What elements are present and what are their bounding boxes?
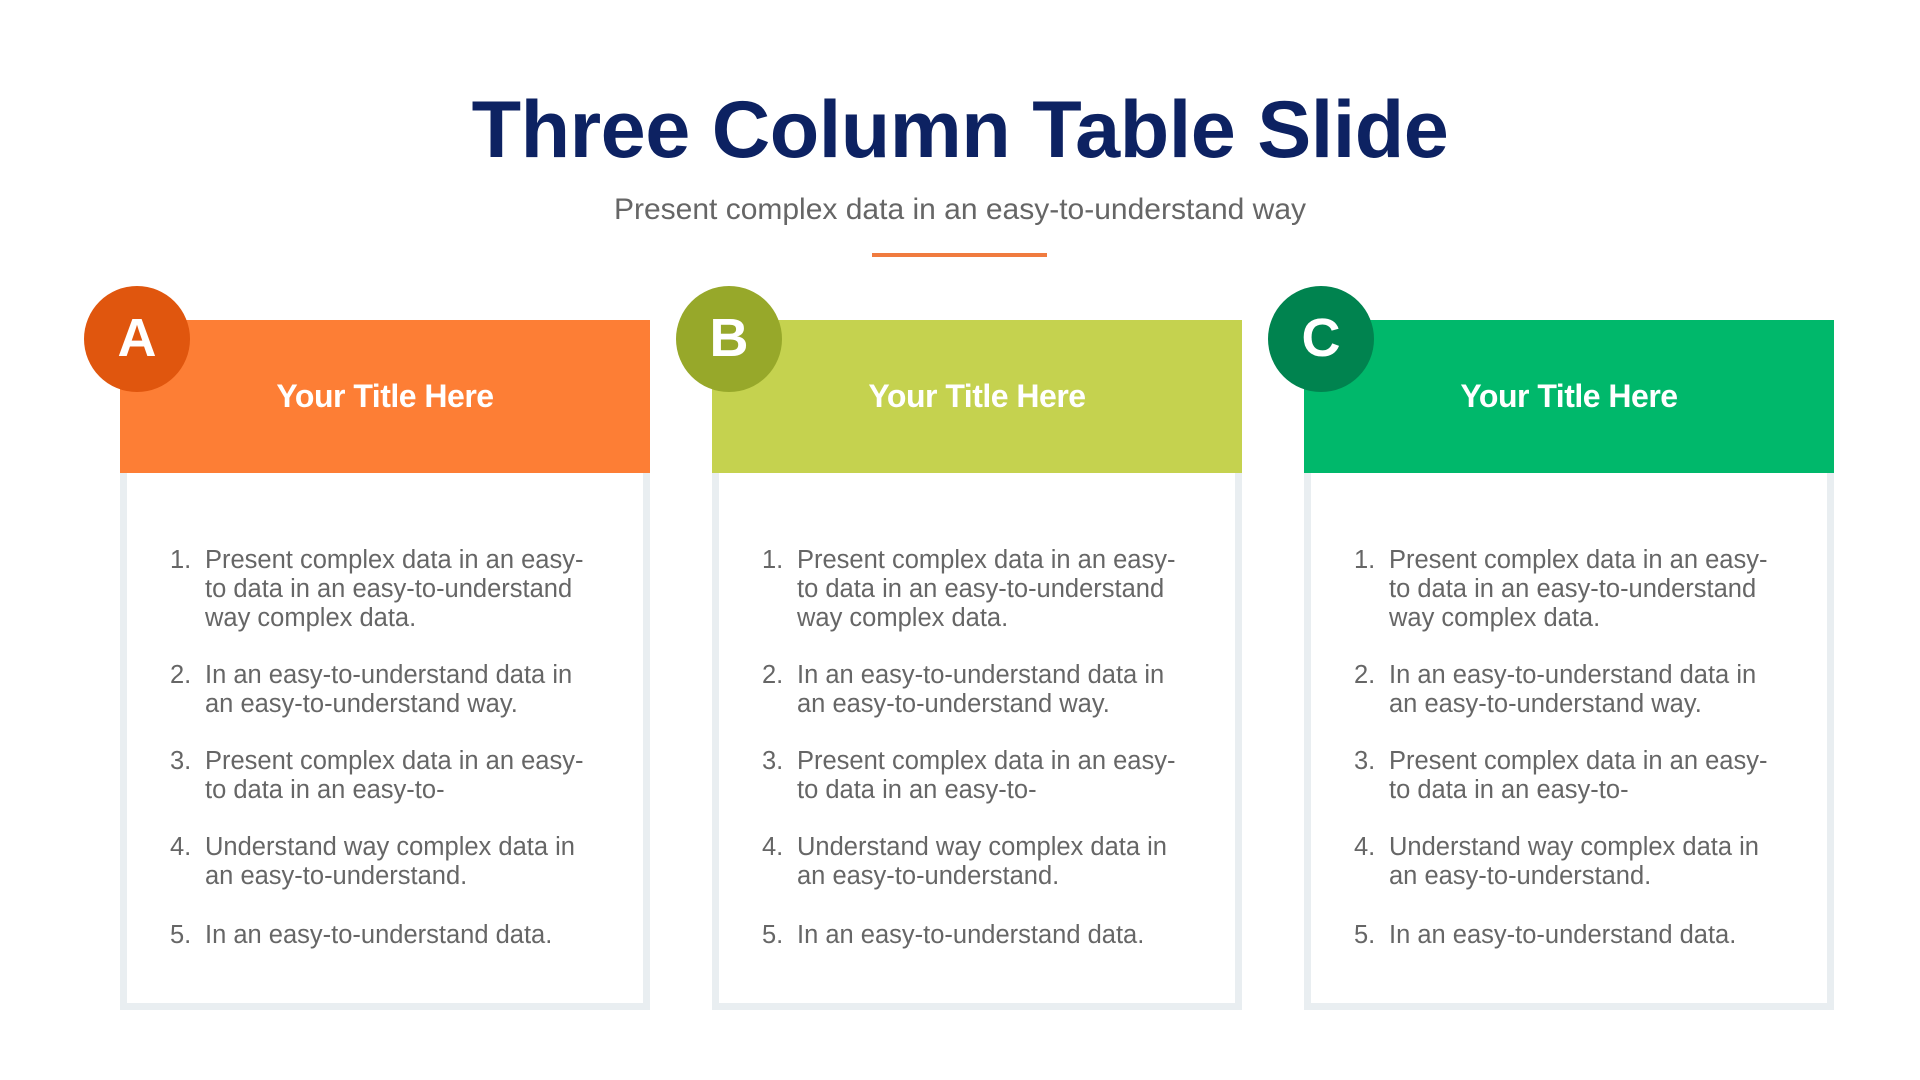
list B: 4. [762, 833, 783, 861]
title: Three Column Table Slide [472, 85, 1448, 175]
list C: to data in an easy-to-understand [1389, 575, 1756, 603]
list A: to data in an easy-to-understand [205, 575, 572, 603]
list C: 3. [1354, 747, 1375, 775]
list A: Present complex data in an easy- [205, 546, 583, 574]
badge A [84, 286, 190, 392]
list C: 1. [1354, 546, 1375, 574]
header B [712, 320, 1242, 473]
list A: to data in an easy-to- [205, 776, 445, 804]
list B: 2. [762, 661, 783, 689]
list A: 1. [170, 546, 191, 574]
list C: In an easy-to-understand data in [1389, 661, 1756, 689]
list B: to data in an easy-to-understand [797, 575, 1164, 603]
list C: 2. [1354, 661, 1375, 689]
list C [1304, 470, 1834, 1010]
list C: to data in an easy-to- [1389, 776, 1629, 804]
list B: 1. [762, 546, 783, 574]
list B: an easy-to-understand. [797, 862, 1059, 890]
list A: Present complex data in an easy- [205, 747, 583, 775]
header A [120, 320, 650, 473]
badge C [1268, 286, 1374, 392]
header B: Your Title Here [868, 378, 1086, 414]
list B: Present complex data in an easy- [797, 747, 1175, 775]
list A: In an easy-to-understand data. [205, 921, 552, 949]
list C: 5. [1354, 921, 1375, 949]
header C [1304, 320, 1834, 473]
list C: an easy-to-understand. [1389, 862, 1651, 890]
list C: Present complex data in an easy- [1389, 546, 1767, 574]
list A: 3. [170, 747, 191, 775]
list A: In an easy-to-understand data in [205, 661, 572, 689]
list A: 2. [170, 661, 191, 689]
list C: an easy-to-understand way. [1389, 690, 1702, 718]
list B [712, 470, 1242, 1010]
list C: 4. [1354, 833, 1375, 861]
list B: to data in an easy-to- [797, 776, 1037, 804]
subtitle: Present complex data in an easy-to-understand way [614, 193, 1306, 226]
list A: 4. [170, 833, 191, 861]
badge A: A [118, 308, 156, 368]
list B: way complex data. [797, 604, 1008, 632]
list B: Understand way complex data in [797, 833, 1167, 861]
list B: 3. [762, 747, 783, 775]
list A [120, 470, 650, 1010]
badge B [676, 286, 782, 392]
list C: Understand way complex data in [1389, 833, 1759, 861]
accent line [872, 253, 1047, 257]
badge B: B [710, 308, 748, 368]
list B: In an easy-to-understand data. [797, 921, 1144, 949]
list C: way complex data. [1389, 604, 1600, 632]
list C: Present complex data in an easy- [1389, 747, 1767, 775]
badge C: C [1302, 308, 1340, 368]
panel: B [676, 286, 1242, 1010]
list B: an easy-to-understand way. [797, 690, 1110, 718]
panel: C [1268, 286, 1834, 1010]
list A: an easy-to-understand. [205, 862, 467, 890]
panel: A [84, 286, 650, 1010]
list B: Present complex data in an easy- [797, 546, 1175, 574]
list A: 5. [170, 921, 191, 949]
list C: In an easy-to-understand data. [1389, 921, 1736, 949]
list A: way complex data. [205, 604, 416, 632]
list B: 5. [762, 921, 783, 949]
list A: Understand way complex data in [205, 833, 575, 861]
header A: Your Title Here [276, 378, 494, 414]
list A: an easy-to-understand way. [205, 690, 518, 718]
list B: In an easy-to-understand data in [797, 661, 1164, 689]
header C: Your Title Here [1460, 378, 1678, 414]
